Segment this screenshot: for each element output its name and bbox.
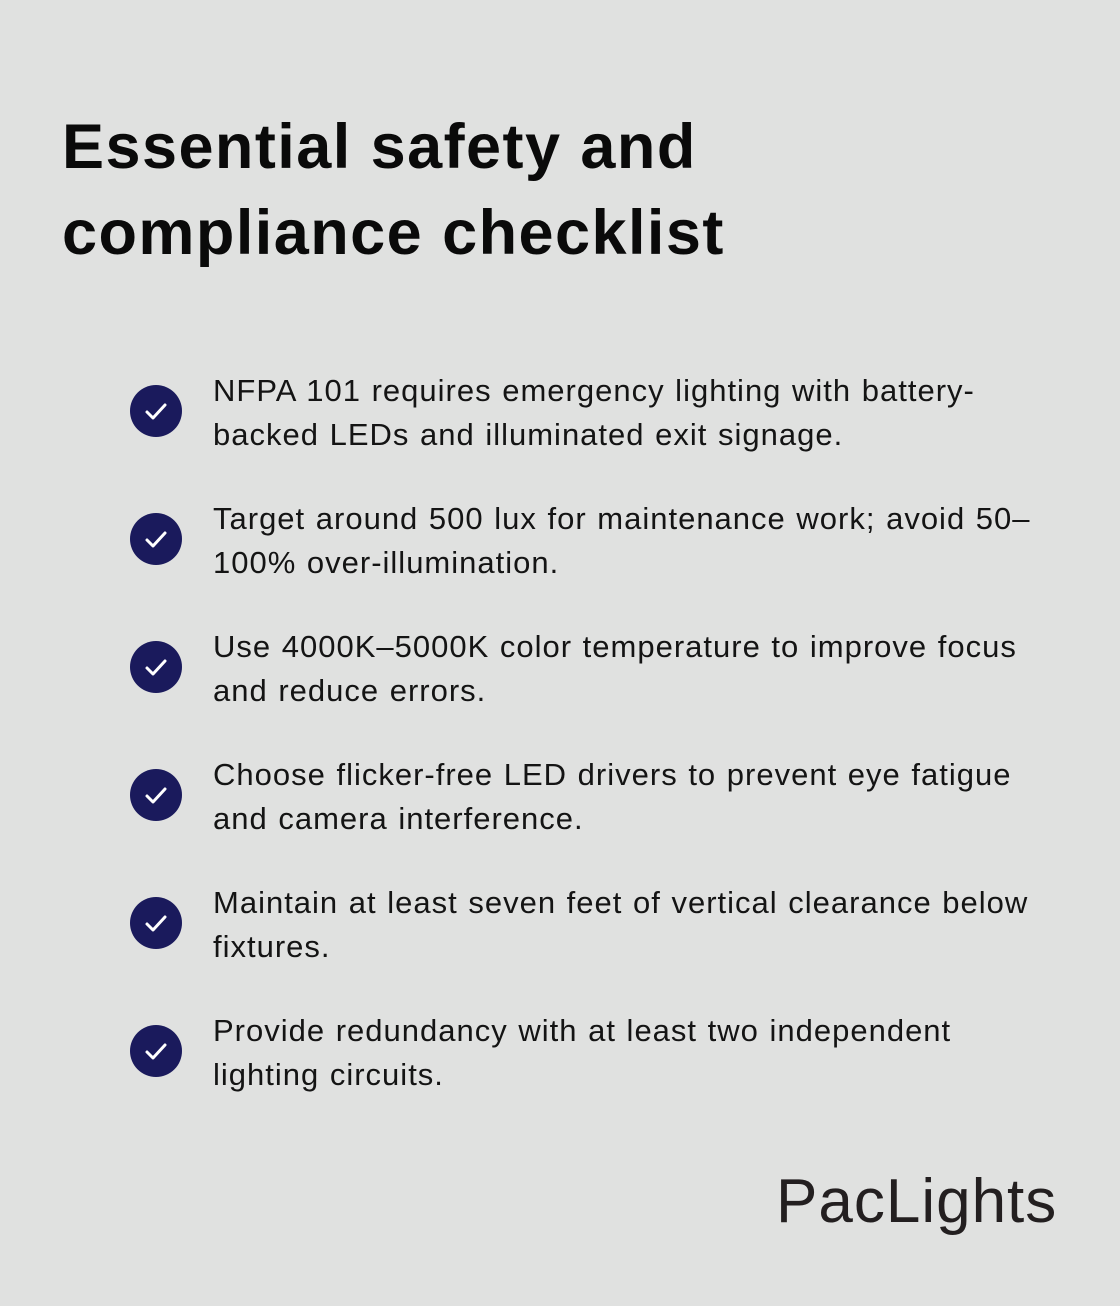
text 6: lighting circuits. — [213, 1057, 444, 1092]
text 5 — [213, 885, 1028, 964]
text 1: backed LEDs and illuminated exit signage. — [213, 417, 843, 452]
text 6: Provide redundancy with at least two independent — [213, 1013, 951, 1048]
text 1: NFPA 101 requires emergency lighting with battery- — [213, 373, 975, 408]
icon: check — [130, 385, 182, 437]
item 3 — [130, 629, 1017, 708]
item 6 — [130, 1013, 951, 1092]
title — [62, 112, 725, 268]
item 4 — [130, 757, 1011, 836]
text 3: Use 4000K–5000K color temperature to improve focus — [213, 629, 1017, 664]
title: compliance checklist — [62, 198, 725, 268]
item 1 — [130, 373, 975, 452]
text 2 — [213, 501, 1031, 580]
text 4 — [213, 757, 1011, 836]
icon: check — [130, 1025, 182, 1077]
logo: PacLights — [776, 1167, 1057, 1236]
text 3 — [213, 629, 1017, 708]
text 5: fixtures. — [213, 929, 331, 964]
text 2: Target around 500 lux for maintenance work; avoid 50– — [213, 501, 1031, 536]
text 4: Choose flicker-free LED drivers to prevent eye fatigue — [213, 757, 1011, 792]
text 2: 100% over-illumination. — [213, 545, 559, 580]
item 5 — [130, 885, 1028, 964]
item 2 — [130, 501, 1031, 580]
text 5: Maintain at least seven feet of vertical clearance below — [213, 885, 1028, 920]
icon: check — [130, 897, 182, 949]
icon: check — [130, 641, 182, 693]
title: Essential safety and — [62, 112, 697, 182]
icon: check — [130, 769, 182, 821]
icon: check — [130, 513, 182, 565]
text 3: and reduce errors. — [213, 673, 486, 708]
text 1 — [213, 373, 975, 452]
text 4: and camera interference. — [213, 801, 584, 836]
text 6 — [213, 1013, 951, 1092]
